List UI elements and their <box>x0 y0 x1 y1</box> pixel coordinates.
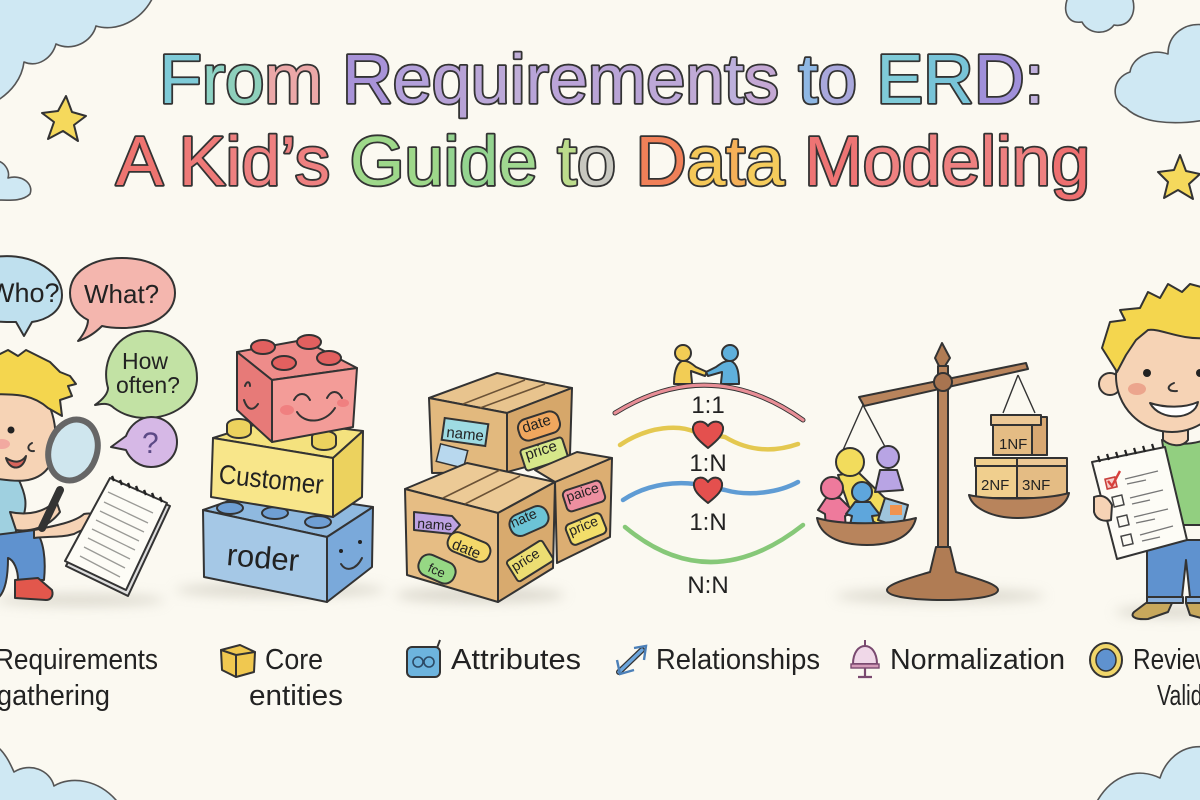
brick: order (blue): roder <box>225 537 301 578</box>
label: requirements gathering <box>0 644 158 712</box>
cloud: top left <box>0 0 154 102</box>
child <box>1099 284 1200 619</box>
cloud: top right small <box>1066 0 1134 32</box>
brick: customer (yellow): Customer <box>217 459 325 500</box>
panel: review child with checklist <box>1092 284 1200 619</box>
icon: core box <box>221 645 255 677</box>
bubble: How often?: often? <box>116 372 180 398</box>
box: back right: price <box>566 512 600 539</box>
brick: order (blue) <box>203 490 373 602</box>
line: 1:N blue <box>623 482 798 500</box>
shadows under illustrations <box>0 583 1200 618</box>
line: 1:1 <box>615 385 803 420</box>
icon: relationships <box>617 646 646 674</box>
label: requirements gathering: Requirements <box>0 644 158 676</box>
label: attributes: Attributes <box>451 644 581 676</box>
bubble: What?: What? <box>84 279 159 309</box>
checklist <box>1092 444 1187 559</box>
cloud: bottom right <box>1095 747 1200 800</box>
bubble: What? <box>70 258 175 341</box>
toys on left pan <box>818 446 908 534</box>
line: N:N <box>625 525 803 562</box>
label N:N: N:N <box>687 572 729 599</box>
NF boxes <box>975 415 1067 498</box>
label: relationships: Relationships <box>656 644 820 676</box>
icon: normalization <box>851 640 879 677</box>
label: requirements gathering: gathering <box>0 680 110 712</box>
heart <box>693 422 723 448</box>
icon: attributes <box>407 640 440 677</box>
box: upper: name <box>446 424 485 445</box>
title <box>116 40 1090 200</box>
left pan <box>817 518 916 545</box>
label: core entities <box>249 644 343 712</box>
panel: relationships <box>615 345 803 599</box>
box: front: price <box>508 545 543 575</box>
label 1:1: 1:1 <box>691 392 725 419</box>
heart <box>694 478 722 503</box>
panel: requirements illustration <box>0 256 197 600</box>
label: review validation <box>1133 644 1200 712</box>
star: right <box>1158 155 1200 199</box>
box: front: nate <box>508 505 539 531</box>
star: left <box>42 96 86 141</box>
title line 1: From Requirements to ERD: <box>159 40 1044 118</box>
NF boxes: 3NF <box>1022 477 1050 494</box>
box: front: name <box>417 515 453 533</box>
panel: lego entities <box>203 335 373 602</box>
panel: attribute boxes <box>405 373 612 602</box>
label 1:N first: 1:N <box>689 450 727 477</box>
bubble: How often?: How <box>122 348 168 374</box>
box: front <box>405 463 555 602</box>
bubble: question mark <box>111 417 177 467</box>
label 1:N second: 1:N <box>689 509 727 536</box>
scale frame <box>843 343 1035 600</box>
right pan <box>969 493 1069 518</box>
box: back right <box>535 452 612 563</box>
cloud: top right large <box>1115 25 1200 123</box>
label: core entities: entities <box>249 680 343 712</box>
line: 1:N yellow <box>620 428 798 449</box>
panel: normalization scale <box>817 343 1069 600</box>
box: front: fce <box>426 560 448 581</box>
NF boxes: 2NF <box>981 477 1009 494</box>
cloud: left small <box>0 160 31 200</box>
handshake figures <box>674 345 739 384</box>
title line 2: A Kid’s Guide to Data Modeling <box>116 122 1090 200</box>
box: upper: price <box>523 438 559 464</box>
box: upper <box>429 373 572 473</box>
bubble: Who? <box>0 256 62 336</box>
child with magnifier <box>0 350 105 600</box>
bubble: question mark: ? <box>142 427 159 460</box>
brick: smiling red <box>237 335 357 442</box>
box: back right: paice <box>564 479 601 505</box>
label: core entities: Core <box>265 644 323 676</box>
bubble: How often? <box>95 331 197 418</box>
label: normalization: Normalization <box>890 644 1065 676</box>
notebook <box>65 476 170 596</box>
icon: review <box>1090 643 1122 677</box>
brick: customer (yellow) <box>211 419 363 517</box>
box: front: date <box>450 536 483 563</box>
hand <box>1094 496 1112 521</box>
NF boxes: 1NF <box>999 436 1027 453</box>
box: upper: date <box>520 412 553 437</box>
cloud: bottom left <box>0 745 120 800</box>
